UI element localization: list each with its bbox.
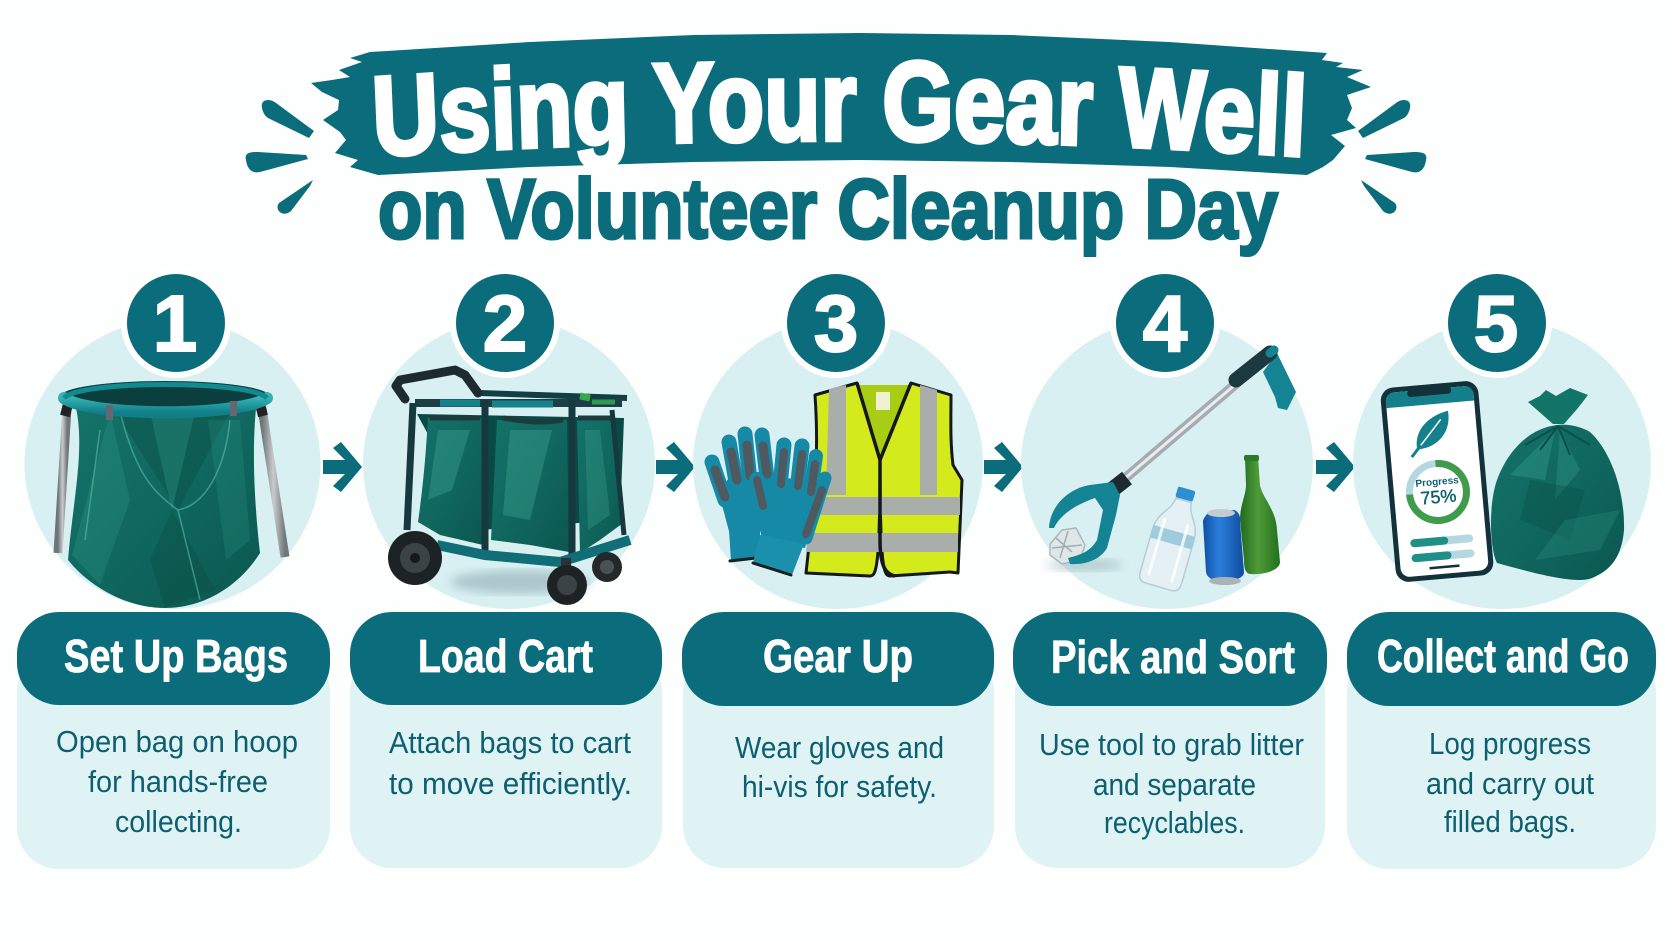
progress bars <box>1410 534 1475 562</box>
number badge 5 <box>1442 268 1552 378</box>
number badge 3: 3 <box>814 279 858 368</box>
card text: collecting. <box>115 804 242 839</box>
number badge 1 <box>121 268 231 378</box>
step 1 panel: set up bags <box>24 268 320 609</box>
progress label: Progress <box>1415 475 1460 490</box>
card text: for hands-free <box>88 764 268 799</box>
progress ring <box>1407 461 1469 523</box>
card text: Log progress <box>1429 726 1591 761</box>
card text: Use tool to grab litter <box>1039 727 1304 762</box>
title line 1: Using Your Gear Well <box>374 59 1304 166</box>
card body <box>683 650 994 868</box>
icon: filled trash bag <box>1491 388 1624 580</box>
card 4 <box>1013 612 1327 868</box>
arrow 2 <box>656 442 695 492</box>
number badge 5: 5 <box>1474 279 1518 368</box>
card heading: Load Cart <box>418 630 593 682</box>
leaf icon <box>1408 411 1452 457</box>
icon: phone with progress app <box>1380 380 1494 583</box>
card heading: Pick and Sort <box>1051 631 1295 683</box>
icon: cart with bags <box>388 370 630 605</box>
card heading: Set Up Bags <box>64 630 288 682</box>
number badge 3 <box>781 268 891 378</box>
background circle <box>363 319 655 609</box>
crumpled paper <box>1050 528 1085 564</box>
number badge 4: 4 <box>1143 279 1188 368</box>
card header <box>1013 612 1327 706</box>
icon: hi-vis vest <box>806 383 962 576</box>
right glove <box>753 445 825 575</box>
step 3 panel: gear up <box>693 268 983 609</box>
arrow 3 <box>984 442 1023 492</box>
background circle <box>693 319 983 609</box>
card header <box>17 612 330 705</box>
card heading: Gear Up <box>763 630 913 682</box>
card text <box>1039 727 1304 840</box>
card text: to move efficiently. <box>389 766 632 801</box>
icon: blue can <box>1203 509 1244 585</box>
card text: recyclables. <box>1104 805 1245 840</box>
decorative sparks right <box>1358 100 1426 214</box>
background circle <box>1353 319 1651 609</box>
title banner <box>311 33 1371 257</box>
icon: green glass bottle <box>1240 455 1280 574</box>
icon: work gloves <box>712 434 825 575</box>
arrow 4 <box>1316 442 1355 492</box>
card text <box>389 725 632 801</box>
number badge 4 <box>1110 268 1220 378</box>
card header <box>682 612 994 706</box>
card header <box>350 612 662 705</box>
left glove <box>712 434 772 561</box>
number badge 2: 2 <box>483 279 527 368</box>
card text: hi-vis for safety. <box>742 769 937 804</box>
card body <box>17 650 330 869</box>
card text: Attach bags to cart <box>389 725 631 760</box>
arrow 1 <box>323 442 362 492</box>
card text: Open bag on hoop <box>56 724 298 759</box>
card text: filled bags. <box>1444 804 1576 839</box>
step 5 panel: collect and go <box>1353 268 1651 609</box>
step 2 panel: load cart <box>363 268 655 609</box>
card body <box>350 650 662 868</box>
card body <box>1015 650 1325 868</box>
icon: litter grabber <box>1047 350 1296 571</box>
card 5 <box>1347 612 1656 869</box>
icon: bag on hoop stand <box>58 381 285 608</box>
icon: plastic bottle <box>1138 483 1207 593</box>
card body <box>1347 650 1656 869</box>
card text <box>735 730 944 804</box>
title line 2: on Volunteer Cleanup Day <box>378 162 1278 256</box>
card text <box>1426 726 1594 839</box>
background circle <box>24 319 320 609</box>
card text <box>56 724 298 839</box>
card 2 <box>350 612 662 868</box>
card 3 <box>682 612 994 868</box>
card text: Wear gloves and <box>735 730 944 765</box>
card text: and carry out <box>1426 766 1594 801</box>
step 4 panel: pick and sort <box>1021 268 1313 609</box>
card header <box>1347 612 1656 706</box>
card 1 <box>17 612 330 869</box>
number badge 1: 1 <box>153 279 197 368</box>
decorative sparks left <box>246 100 314 214</box>
background circle <box>1021 319 1313 609</box>
progress value: 75% <box>1420 485 1457 508</box>
brush stroke banner <box>311 33 1371 175</box>
number badge 2 <box>450 268 560 378</box>
card text: and separate <box>1093 767 1256 802</box>
